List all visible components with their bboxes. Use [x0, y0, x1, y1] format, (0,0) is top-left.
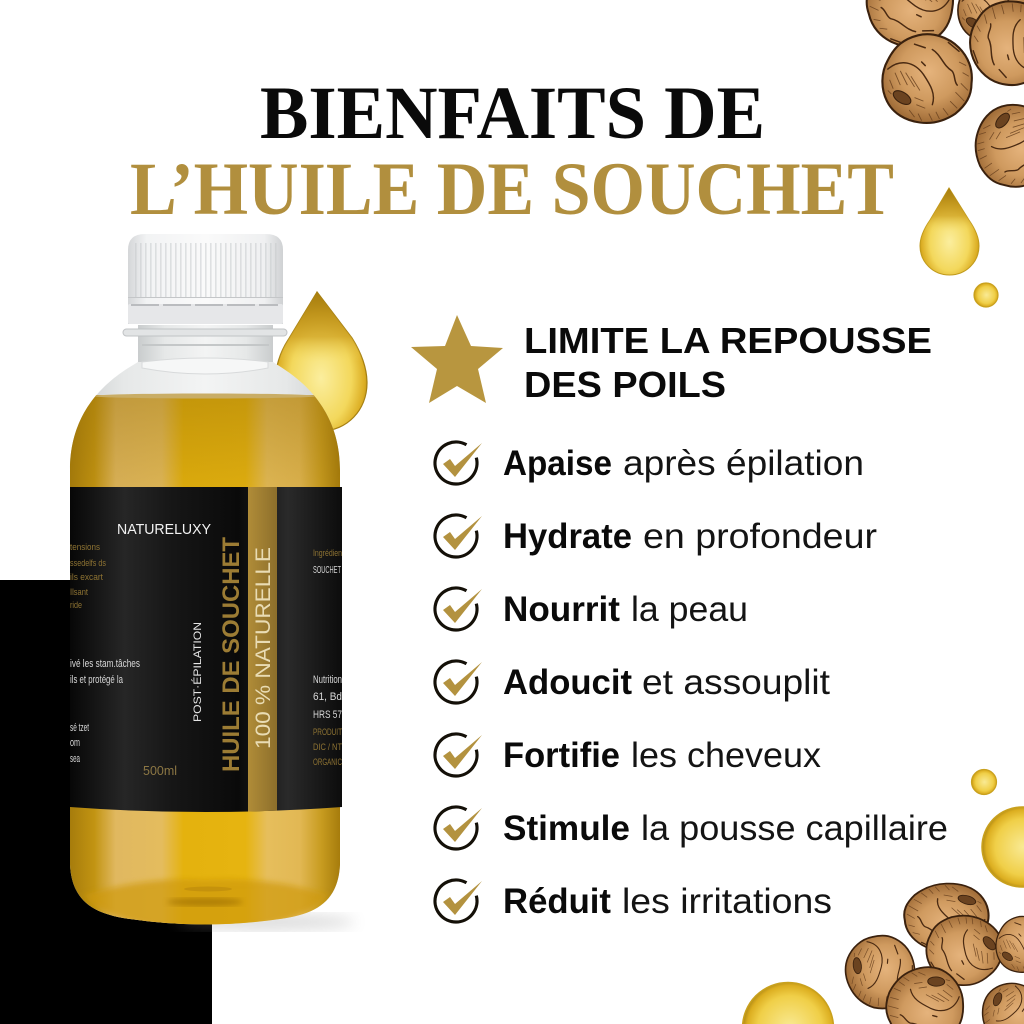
souchet tubers top right [855, 0, 1024, 193]
benefit: fortifie: Fortifie [503, 736, 620, 775]
label right text [313, 548, 342, 768]
small oil droplet lower right [972, 770, 996, 794]
bottle cap [128, 234, 283, 324]
bottle shadow [175, 914, 355, 930]
label 100 percent natural: 100 % NATURELLE [252, 547, 275, 749]
small oil droplet top right [974, 283, 998, 307]
label left text: sé tzet [70, 722, 89, 734]
label left text: tensions [70, 542, 100, 553]
benefit: apaise [435, 442, 864, 484]
benefit: hydrate: en profondeur [643, 517, 877, 556]
label product name: HUILE DE SOUCHET [218, 537, 245, 772]
label right text: SOUCHET [313, 565, 341, 576]
benefit: adoucit: et assouplit [642, 663, 830, 702]
oil drop top right [920, 188, 979, 275]
title line 2: L’HUILE DE SOUCHET [130, 148, 894, 231]
label right text: PRODUIT [313, 727, 342, 738]
bottle neck and shoulder glass [70, 325, 340, 924]
title [130, 72, 894, 231]
bottle oil [70, 394, 340, 930]
souchet tubers bottom right [833, 878, 1024, 1024]
bottle [70, 234, 342, 930]
benefit: stimule [435, 807, 948, 849]
main benefit heading: LIMITE LA REPOUSSE [524, 320, 932, 361]
title line 1: BIENFAITS DE [260, 72, 765, 155]
label left text: om [70, 737, 80, 749]
label left text: ride [70, 600, 82, 611]
main benefit heading [524, 320, 932, 405]
large oil droplet lower right [982, 807, 1024, 887]
black background block [0, 580, 212, 1024]
label left text: sea [70, 753, 80, 765]
label left text: ils et protégé la [70, 674, 124, 686]
label volume: 500ml [143, 763, 177, 778]
label brand: NATURELUXY [117, 521, 211, 538]
label right text: DIC / NT [313, 742, 342, 753]
benefit: fortifie [435, 734, 822, 776]
label left text [70, 542, 140, 765]
benefit: stimule: Stimule [503, 809, 630, 848]
star icon [411, 315, 503, 403]
label left text: ils excart [70, 572, 103, 583]
label right text: HRS 57 [313, 709, 342, 721]
benefit: stimule: la pousse capillaire [641, 809, 948, 848]
label left text: ssedelfs ds [70, 558, 106, 569]
benefit: adoucit [435, 661, 830, 703]
label background [70, 487, 342, 822]
label left text: Ilsant [70, 587, 88, 598]
label right text: 61, Bd [313, 691, 342, 703]
bottle label [70, 487, 342, 822]
benefit: adoucit: Adoucit [503, 663, 632, 702]
benefit: reduit: Réduit [503, 882, 611, 921]
label right text: Ingrédien [313, 548, 342, 559]
benefit: nourrit [435, 588, 748, 630]
benefit: reduit: les irritations [622, 882, 832, 921]
oil drop behind bottle [275, 292, 367, 431]
label post-epilation: POST·ÉPILATION [191, 622, 204, 722]
benefit: hydrate: Hydrate [503, 517, 632, 556]
main benefit heading: DES POILS [524, 364, 726, 405]
label right text: ORGANIC [313, 757, 342, 768]
benefits list [435, 442, 948, 922]
benefit: hydrate [435, 515, 877, 557]
label left text: ivé les stam.tâches [70, 658, 140, 670]
benefit: apaise: Apaise [503, 444, 612, 483]
benefit: reduit [435, 880, 832, 922]
benefit: nourrit: la peau [631, 590, 748, 629]
benefit: nourrit: Nourrit [503, 590, 620, 629]
benefit: apaise: après épilation [623, 444, 864, 483]
oil droplet bottom [742, 982, 834, 1024]
label right text: Nutrition [313, 674, 342, 686]
benefit: fortifie: les cheveux [631, 736, 822, 775]
